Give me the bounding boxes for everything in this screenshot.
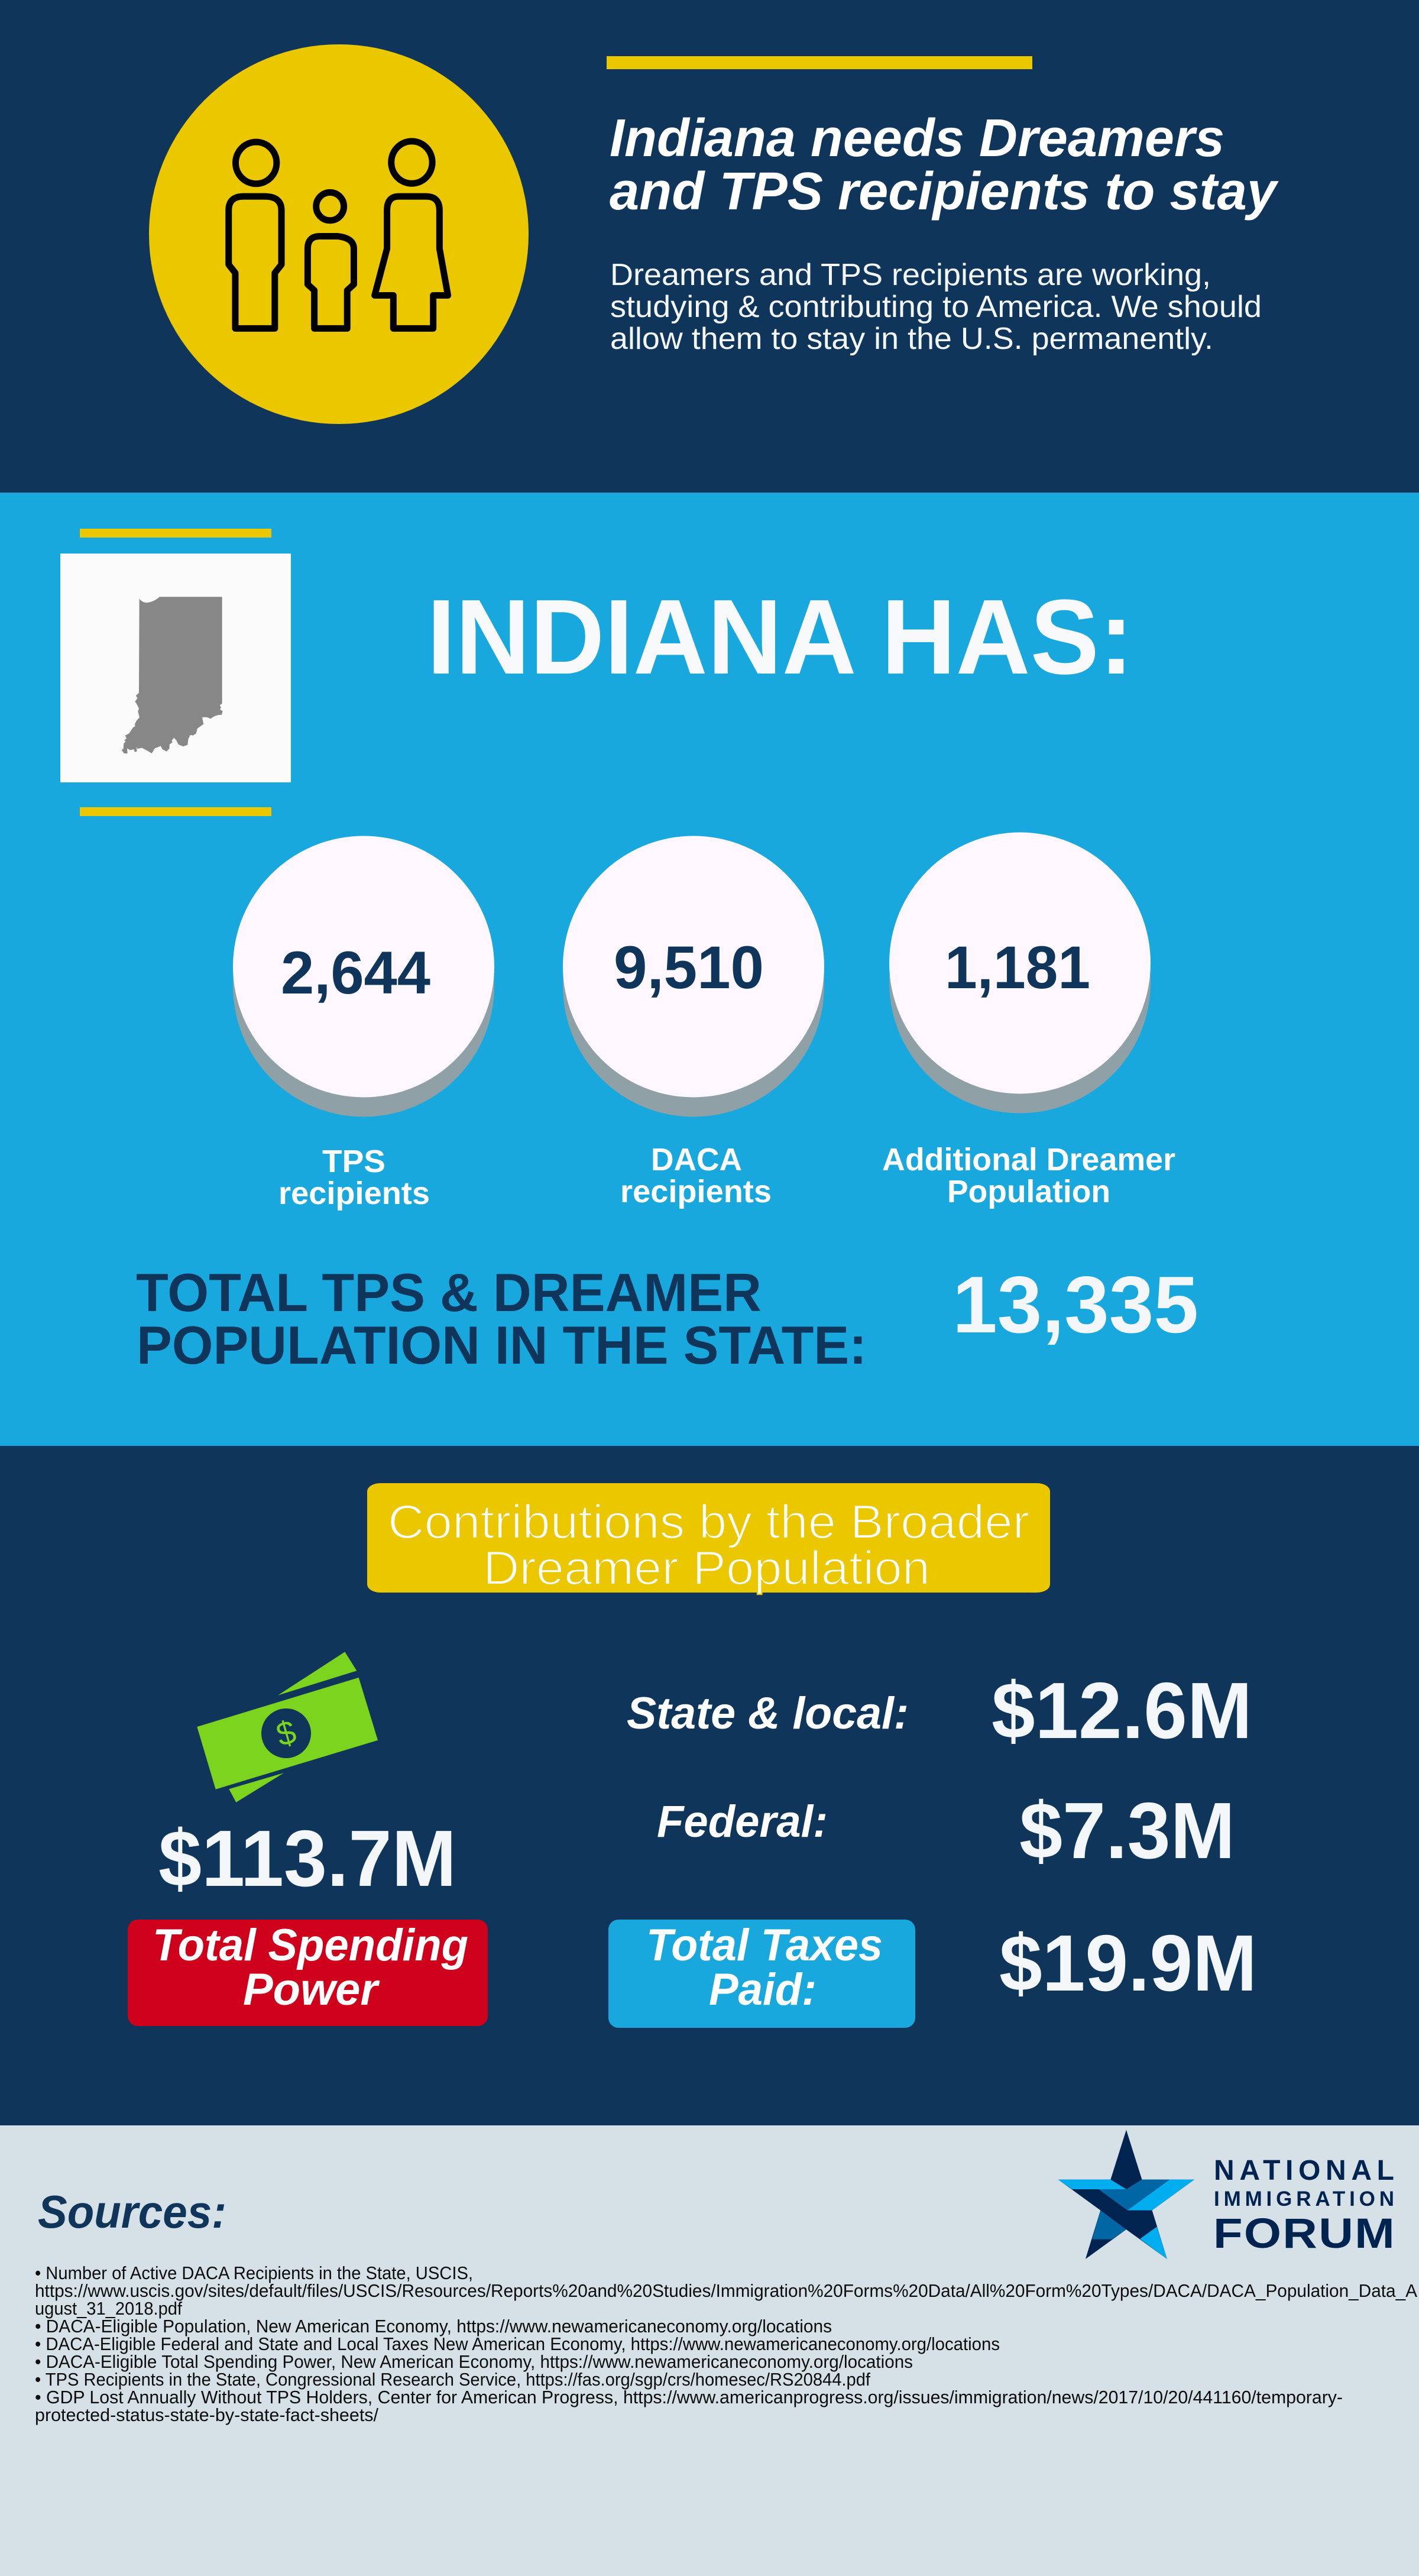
stat: DACA recipients	[563, 836, 824, 1209]
panel: header	[0, 0, 1419, 493]
intro text: Dreamers and TPS recipients are working,	[610, 258, 1211, 292]
stat: federal taxes: Federal:	[657, 1797, 828, 1847]
panel: Indiana has	[0, 493, 1419, 1446]
label: total spending power	[128, 1920, 488, 2026]
text block: source list: • Number of Active DACA Recipients in the State, USCIS,	[35, 2263, 473, 2283]
label: total taxes paid: Paid:	[709, 1965, 817, 2015]
stat: DACA recipients: 9,510	[614, 934, 764, 1001]
stat: TPS recipients: TPS	[322, 1144, 385, 1179]
banner: contributions heading: Contributions by the Broader	[388, 1496, 1029, 1549]
logo: National Immigration Forum	[1058, 2130, 1396, 2259]
heading: sources: Sources:	[38, 2186, 226, 2238]
stat: state and local taxes: $12.6M	[992, 1666, 1252, 1755]
logo: National Immigration Forum: NATIONAL	[1214, 2155, 1394, 2186]
text block: source list: • GDP Lost Annually Without TPS Holders, Center for American Progress, https://www.americanprogress.org/issues/immigration/news/2017/10/20/441160/temporary-	[35, 2387, 1343, 2407]
title: and TPS recipients to stay	[610, 162, 1279, 221]
text block: source list: • TPS Recipients in the State, Congressional Research Service, https://fas.org/sgp/crs/homesec/RS20844.pdf	[35, 2369, 870, 2390]
text block: source list: protected-status-state-by-state-fact-sheets/	[35, 2405, 378, 2425]
icon: logo star	[1058, 2130, 1194, 2259]
intro text: studying & contributing to America. We should	[610, 290, 1262, 324]
stat: TPS recipients: 2,644	[281, 939, 430, 1007]
label: total spending power: Power	[243, 1965, 380, 2015]
stat: state and local taxes	[627, 1666, 1252, 1755]
accent bar: above map	[80, 529, 271, 538]
stat: additional Dreamer population: Population	[947, 1174, 1110, 1209]
text block: source list	[35, 2263, 1417, 2425]
stat: DACA recipients: recipients	[620, 1174, 772, 1209]
label: total taxes paid	[608, 1920, 915, 2028]
banner: contributions heading	[367, 1483, 1050, 1595]
stat: federal taxes: $7.3M	[1019, 1786, 1235, 1875]
intro text	[610, 258, 1262, 356]
stat: additional Dreamer population: Additional Dreamer	[882, 1142, 1175, 1177]
stat: additional Dreamer population	[882, 833, 1175, 1209]
icon: banknote	[197, 1652, 378, 1802]
map card: Indiana	[60, 554, 291, 782]
stat: total taxes value: $19.9M	[999, 1918, 1257, 2008]
text block: source list: ugust_31_2018.pdf	[35, 2298, 182, 2319]
stat: total spending power value: $113.7M	[158, 1814, 456, 1903]
stat: DACA recipients: DACA	[651, 1142, 742, 1177]
accent bar: top	[607, 56, 1032, 69]
stat: TPS recipients: recipients	[278, 1176, 430, 1211]
label: total taxes paid: Total Taxes	[646, 1920, 883, 1970]
stat: federal taxes	[657, 1786, 1235, 1875]
logo: National Immigration Forum: FORUM	[1213, 2211, 1396, 2257]
text block: source list: • DACA-Eligible Federal and State and Local Taxes New American Economy, https://www.newamericaneconomy.org/locations	[35, 2334, 1000, 2354]
logo: National Immigration Forum: IMMIGRATION	[1214, 2187, 1394, 2211]
accent bar: below map	[80, 807, 271, 816]
text block: source list: • DACA-Eligible Population, New American Economy, https://www.newamericaneconomy.org/locations	[35, 2316, 832, 2336]
heading: Indiana has: INDIANA HAS:	[427, 578, 1133, 697]
title	[610, 109, 1279, 221]
stat: additional Dreamer population: 1,181	[945, 934, 1090, 1001]
total label: POPULATION IN THE STATE:	[137, 1316, 867, 1376]
title: Indiana needs Dreamers	[610, 109, 1224, 168]
icon: Indiana state silhouette	[122, 597, 223, 753]
text block: source list: • DACA-Eligible Total Spending Power, New American Economy, https://www.newamericaneconomy.org/locations	[35, 2351, 913, 2372]
icon: banknote: $	[272, 1713, 300, 1753]
label: total spending power: Total Spending	[153, 1920, 468, 1970]
panel: contributions	[0, 1446, 1419, 2125]
total label	[136, 1263, 867, 1376]
intro text: allow them to stay in the U.S. permanently.	[610, 322, 1213, 356]
stat: state and local taxes: State & local:	[627, 1688, 909, 1739]
banner: contributions heading: Dreamer Population	[483, 1542, 930, 1595]
panel: sources	[0, 2125, 1419, 2576]
total value: 13,335	[953, 1260, 1198, 1350]
total label: TOTAL TPS & DREAMER	[136, 1263, 762, 1323]
icon: family in yellow circle	[149, 44, 529, 424]
stat: TPS recipients	[233, 836, 494, 1211]
